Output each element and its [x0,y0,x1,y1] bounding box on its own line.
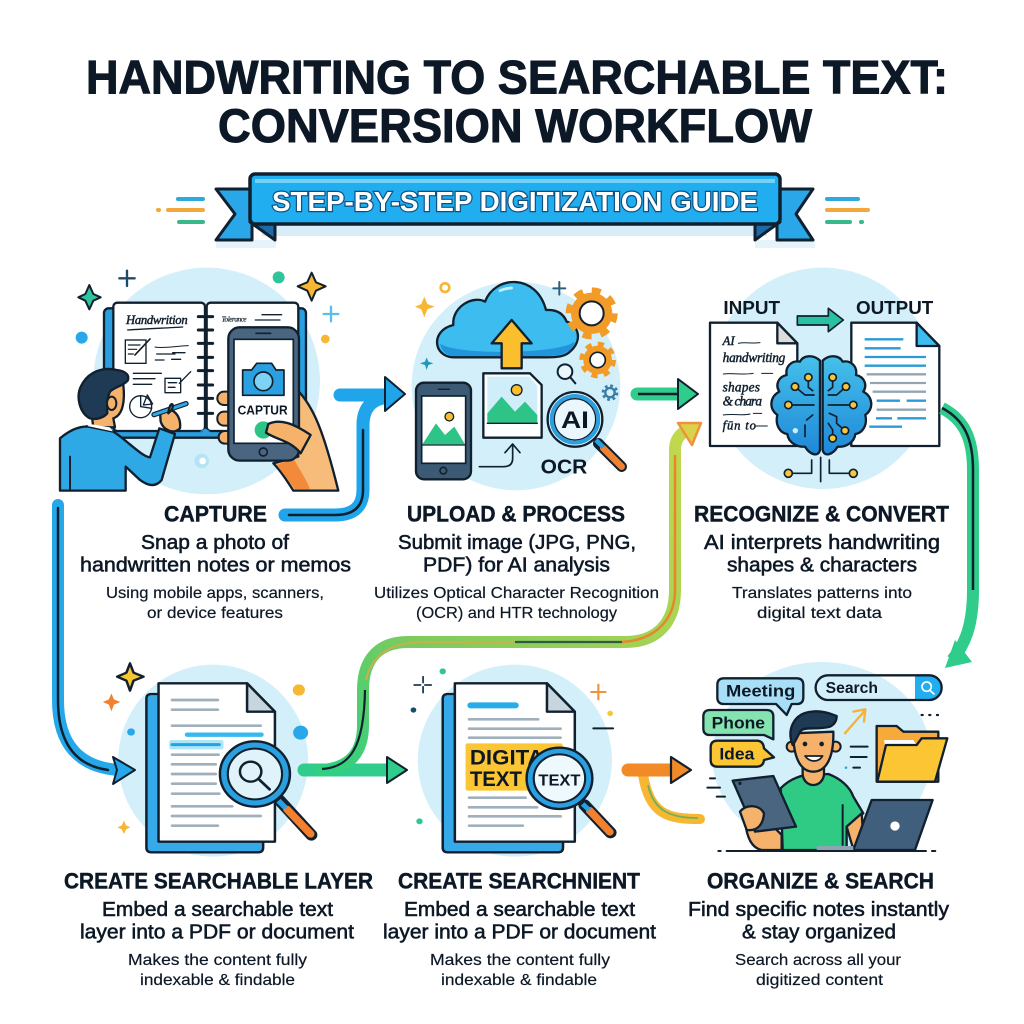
step text: create searchable layer: CREATE SEARCHABLE LAYER [64,868,373,894]
step text: recognize and convert: Translates patterns into [732,585,912,602]
banner: step-by-step digitization guide [216,174,815,248]
step text: create searchable layer [64,868,373,989]
arrow: upload to recognize [637,379,698,409]
step text: recognize and convert: digital text data [757,605,882,622]
arrow: long feedback path up to recognize [322,423,701,770]
step text: capture: Using mobile apps, scanners, [106,585,324,602]
search bar [816,675,942,700]
step text: upload and process [374,502,659,622]
label: output: OUTPUT [856,297,934,318]
panel: recognize and convert illustration [710,268,939,489]
icons: sparkles [103,663,308,834]
step text: capture: or device features [147,605,283,622]
step text: organize and search: ORGANIZE & SEARCH [707,868,934,894]
arrow: searchable layer to digital text [304,757,407,783]
icon: folder [877,726,947,782]
title: HANDWRITING TO SEARCHABLE TEXT: [86,50,948,104]
icon: gears [569,291,617,400]
icon: AI magnifier [541,364,622,478]
icon: magnifying glass [220,741,311,835]
panel: organize and search illustration [703,662,947,851]
step text: upload and process: PDF) for AI analysis [423,554,610,576]
icon: document with digital text: TEXT [470,767,522,791]
search bar: Search [826,680,878,697]
step text: create searchnient: CREATE SEARCHNIENT [398,868,640,894]
icon: AI magnifier: OCR [541,455,587,478]
icon: phone with image [416,383,471,479]
step text: recognize and convert [694,502,949,622]
title: CONVERSION WORKFLOW [218,99,813,152]
arrow: capture to upload [285,377,405,515]
icon: handwritten input document: handwriting [723,350,786,365]
step text: create searchnient: layer into a PDF or document [383,922,656,944]
icon: open spiral notebook [104,303,306,438]
icons: sparkles [415,282,565,370]
step text: upload and process: UPLOAD & PROCESS [407,502,625,526]
callout: phone: Phone [712,713,765,732]
step text: create searchnient: indexable & findable [441,972,597,989]
icons: sparkles and dots [76,271,338,468]
step text: create searchable layer: Makes the content fully [128,952,307,969]
step text: organize and search: Search across all your [735,952,902,969]
arrow: recognize to organize [942,408,973,668]
step text: create searchnient: Makes the content fully [430,952,610,969]
icon: photo document [479,373,542,467]
arrow: up to search [845,709,865,733]
panel: upload and process illustration [412,282,622,490]
icon: magnifying glass over text: TEXT [538,771,581,790]
icon: AI magnifier: AI [561,407,589,434]
icon: document stack with highlighted lines [146,683,275,852]
icons: sparkles [411,668,613,824]
step text: organize and search: digitized content [756,972,884,989]
icon: handwritten input document: AI [722,334,735,348]
banner: step-by-step digitization guide: STEP-BY-STEP DIGITIZATION GUIDE [272,186,758,217]
step text: upload and process: Utilizes Optical Character Recognition [374,585,659,602]
icon: smartphone with camera: CAPTUR [238,404,288,418]
callout: idea: Idea [719,744,755,763]
icon: open spiral notebook: Tolerance [222,314,247,323]
step text: create searchable layer: indexable & findable [140,972,295,989]
step text: recognize and convert: RECOGNIZE & CONVERT [694,502,949,526]
step text: recognize and convert: AI interprets handwriting [704,532,940,554]
step text: organize and search: Find specific notes instantly [688,899,949,921]
icon: handwritten input document [710,323,797,446]
step text: recognize and convert: shapes & characters [727,554,917,576]
icon: cloud upload [437,282,578,368]
step text: create searchnient [383,868,656,989]
callout: idea [711,741,774,767]
panel: digital text illustration [411,665,613,857]
icon: digital output document [851,323,939,446]
icon: document with digital text [443,683,575,852]
icon: handwritten input document: & chara [723,394,762,409]
icon: document with digital text: DIGITAL [470,745,557,769]
step text: create searchnient: Embed a searchable text [404,899,635,921]
icon: person writing [60,369,186,491]
step text: capture: handwritten notes or memos [80,554,351,576]
arrow: organize loop [628,757,700,819]
callout: meeting: Meeting [726,682,795,701]
decorative speed lines beside banner [158,199,868,222]
icon: handwritten input document: fūn to [723,418,756,432]
icon: magnifying glass over text [527,748,611,833]
icon: open spiral notebook: Handwrition [125,313,188,327]
step text: organize and search: & stay organized [742,922,896,944]
icon: AI brain [771,356,871,482]
icon: smartphone with camera [217,327,338,491]
step text: upload and process: Submit image (JPG, PNG, [398,532,636,554]
step text: organize and search [688,868,949,989]
step text: create searchable layer: Embed a searchable text [102,899,333,921]
label: input: INPUT [723,297,781,318]
step text: create searchable layer: layer into a PDF or document [80,922,354,944]
title [86,50,948,152]
step text: capture: CAPTURE [164,502,267,526]
arrow: input to output [797,308,843,332]
callout: meeting [717,678,803,715]
icon: handwritten input document: shapes [723,379,760,394]
step text: capture: Snap a photo of [141,532,289,554]
callout: phone [703,710,773,739]
arrow: capture down to searchable layer [58,505,135,784]
panel: capture illustration [60,268,338,494]
panel: searchable layer illustration [103,663,311,857]
step text: upload and process: (OCR) and HTR technology [416,605,617,622]
icon: person with tablet and laptop [707,711,938,851]
step text: capture [80,502,351,622]
